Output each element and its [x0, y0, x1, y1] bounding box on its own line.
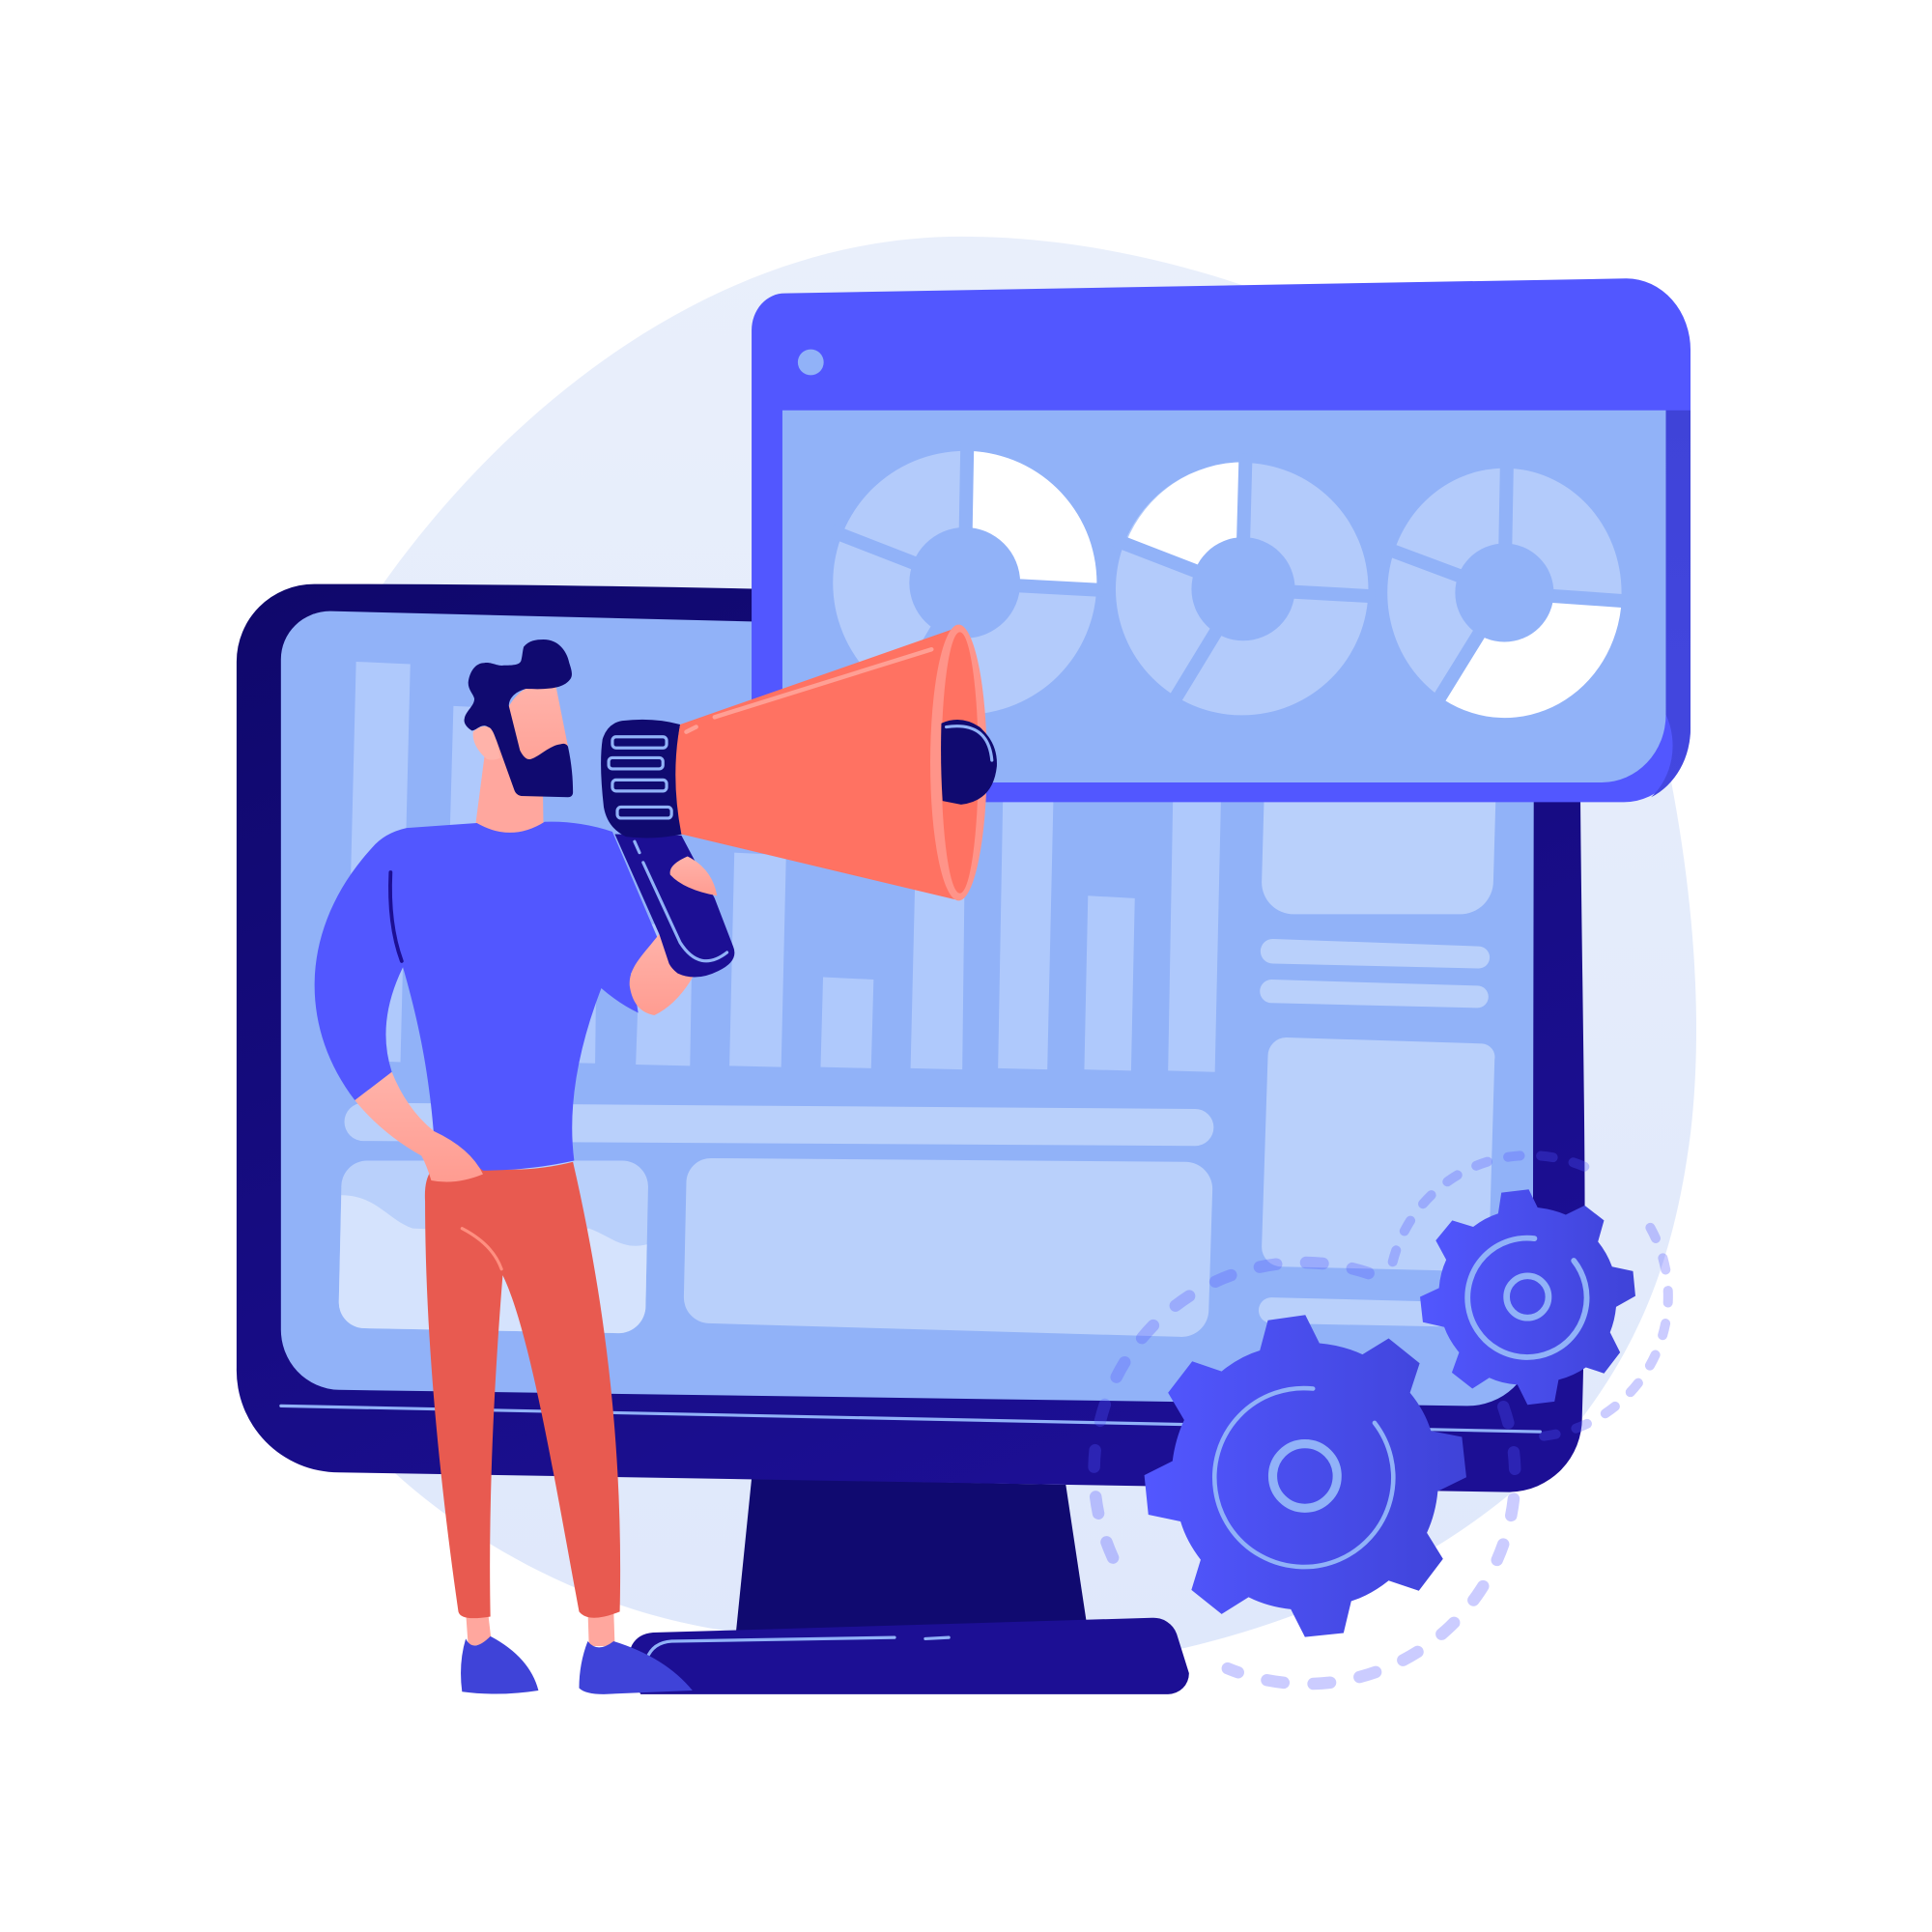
megaphone grip	[601, 720, 683, 838]
donut chart 2	[1112, 453, 1375, 715]
middle screen card	[684, 1158, 1212, 1337]
megaphone	[601, 625, 997, 978]
megaphone rim	[930, 625, 987, 900]
background blob	[246, 237, 1696, 1651]
window content area	[782, 411, 1665, 782]
monitor body	[237, 584, 1585, 1492]
monitor stand	[735, 1479, 1087, 1636]
arm on hip	[355, 1072, 483, 1182]
ear	[473, 726, 500, 760]
bar chart on screen	[346, 662, 1221, 1072]
handle highlight	[635, 841, 727, 961]
window frame	[752, 278, 1690, 802]
cone highlight	[686, 649, 931, 732]
right shoe	[579, 1641, 693, 1694]
left ankle	[466, 1611, 492, 1646]
hand under megaphone	[630, 934, 695, 1015]
gears	[1145, 1189, 1635, 1637]
monitor screen	[281, 611, 1534, 1406]
megaphone handle	[614, 835, 734, 978]
monitor base	[629, 1618, 1189, 1694]
fingers on handle	[670, 856, 717, 895]
dashboard window	[752, 278, 1690, 802]
donut chart 3	[1382, 461, 1629, 718]
right text lines	[1259, 939, 1490, 1327]
right top screen card	[1262, 795, 1495, 914]
neck	[475, 739, 543, 835]
left screen card with wave	[339, 1161, 648, 1333]
trousers	[425, 1162, 620, 1618]
window dot	[798, 350, 824, 375]
right ankle	[587, 1609, 614, 1646]
megaphone mouth	[941, 632, 979, 894]
dashed orbits	[1094, 1155, 1668, 1684]
face	[508, 685, 573, 788]
sleeve fold	[390, 872, 402, 961]
grip slots	[609, 737, 671, 818]
left shoe	[461, 1636, 538, 1694]
megaphone cap	[941, 720, 997, 805]
small gear	[1420, 1189, 1635, 1405]
big gear	[1145, 1315, 1466, 1637]
right lower screen card	[1262, 1037, 1494, 1271]
person	[315, 639, 693, 1694]
hair and beard	[465, 639, 573, 797]
donut chart 1	[832, 443, 1104, 715]
cap highlight	[947, 726, 992, 760]
bezel highlight line	[281, 1406, 1540, 1432]
shirt	[315, 822, 658, 1171]
megaphone cone	[675, 629, 955, 899]
trouser crease	[462, 1229, 501, 1269]
window side shade	[1651, 411, 1690, 797]
search bar on screen	[345, 1103, 1213, 1146]
